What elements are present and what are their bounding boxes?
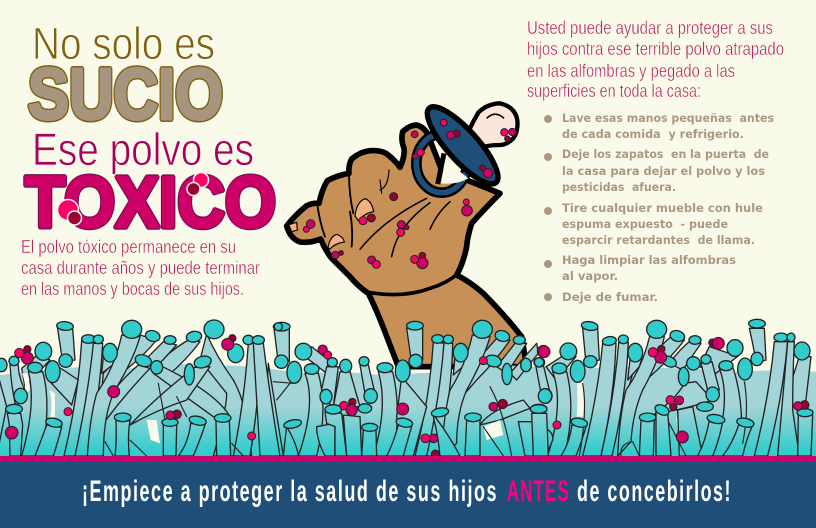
list: tips: Lave esas manos pequeñas antes: [562, 111, 774, 125]
heading: TOXICO with dust spots: TOXICO: [25, 163, 276, 243]
banner text: ¡Empiece a proteger la salud de sus hijos: [82, 475, 498, 508]
illustration: hand holding pacifier: [287, 98, 527, 367]
carpet fibers: left section: [0, 320, 282, 456]
heading: SUCIO: SUCIO: [28, 55, 223, 135]
banner: magenta stripe and blue band: [0, 456, 816, 528]
list: tips: Tire cualquier mueble con hule: [562, 201, 763, 215]
text block: intro to tips: en las alfombras y pegado a las: [527, 61, 735, 81]
banner text: ANTES: [507, 475, 570, 508]
carpet fibers: middle section: [263, 320, 552, 456]
text block: intro to tips: superficies en toda la casa:: [527, 81, 701, 101]
dust spots in carpet: [5, 335, 809, 458]
hand creases and finger lines: [317, 170, 458, 295]
list: tips: de cada comida y refrigerio.: [562, 127, 744, 141]
dust spots on hand: [303, 119, 516, 269]
list: tips: Haga limpiar las alfombras: [562, 253, 736, 267]
text block: toxic dust paragraph: El polvo tóxico permanece en su: [21, 237, 236, 257]
list: tips: esparcir retardantes de llama.: [562, 233, 755, 247]
carpet base mass: [0, 363, 816, 460]
heading: Ese polvo es: Ese polvo es: [32, 124, 254, 175]
list: tips: Deje de fumar.: [562, 290, 658, 304]
carpet fibers: [0, 319, 816, 460]
list: tips: al vapor.: [562, 269, 618, 283]
fingernails: [289, 199, 374, 249]
hand: [287, 125, 527, 367]
text block: intro to tips: Usted puede ayudar a proteger a sus: [527, 18, 773, 38]
list: tips: Deje los zapatos en la puerta de: [562, 147, 769, 161]
text block: toxic dust paragraph: [21, 237, 260, 299]
carpet fibers: right section: [530, 319, 813, 456]
list: tips: [544, 111, 774, 304]
list: tips: la casa para dejar el polvo y los: [562, 164, 765, 178]
heading: No solo es: No solo es: [32, 18, 215, 69]
heading: SUCIO: SUCIO: [28, 55, 223, 135]
pacifier ring: [416, 134, 467, 193]
text block: toxic dust paragraph: en las manos y bocas de sus hijos.: [21, 279, 244, 299]
heading: TOXICO with dust spots: TOXICO: [25, 163, 276, 243]
pacifier shield: [418, 98, 508, 193]
text block: toxic dust paragraph: casa durante años y puede terminar: [21, 258, 260, 278]
pacifier nipple: [465, 103, 517, 149]
list: tips: espuma expuesto - puede: [562, 217, 728, 231]
list: tips: pesticidas afuera.: [562, 180, 676, 194]
text block: intro to tips: [527, 18, 784, 101]
